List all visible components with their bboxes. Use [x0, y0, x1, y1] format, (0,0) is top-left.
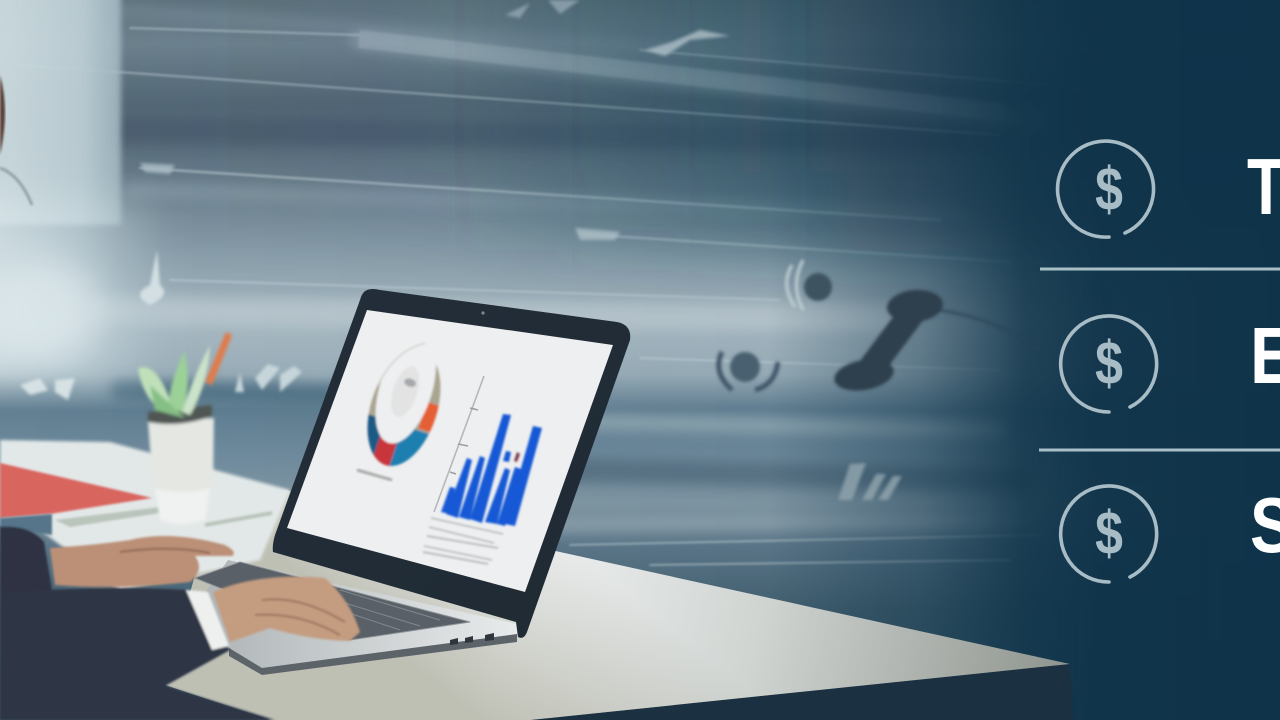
chart caption lines	[423, 518, 503, 564]
red stem	[205, 332, 232, 385]
businessperson arms	[0, 527, 360, 720]
laptop	[195, 289, 630, 675]
divider	[1039, 448, 1280, 452]
list row 2	[1061, 311, 1280, 412]
laptop lid	[273, 289, 630, 638]
axis line	[434, 376, 484, 512]
icon: dollar circle: $	[1095, 155, 1123, 223]
pens on desk	[55, 507, 272, 527]
desk side shadow	[500, 664, 1073, 720]
background: blurred telephone and ring marks	[20, 0, 1040, 500]
bar chart	[441, 414, 542, 526]
donut chart	[366, 342, 442, 468]
telephone handset	[868, 308, 916, 372]
cuff	[186, 590, 229, 650]
list row 3	[1061, 482, 1280, 582]
icon: dollar circle	[1061, 486, 1157, 582]
desk	[0, 440, 1073, 720]
soil	[148, 405, 212, 424]
background: bright window haze on the left	[0, 0, 170, 380]
desk top surface left	[0, 440, 290, 590]
near sleeve	[0, 588, 275, 720]
ports	[450, 633, 494, 645]
icon: dollar circle	[1061, 316, 1157, 412]
plant in white cup	[138, 332, 232, 524]
webcam	[481, 311, 485, 315]
cup	[148, 418, 214, 492]
icon: dollar circle: $	[1095, 329, 1123, 397]
screen	[287, 310, 613, 592]
leaves	[138, 367, 174, 415]
laptop base	[195, 560, 517, 675]
far sleeve	[0, 527, 52, 596]
far hand	[50, 536, 234, 587]
icon: dollar circle	[1058, 141, 1154, 237]
strip below notebook	[0, 514, 52, 535]
icon: dollar circle: $	[1095, 499, 1123, 567]
red notebook	[0, 463, 152, 518]
keyboard	[195, 562, 470, 640]
list row 1	[1058, 141, 1280, 237]
desk top surface right	[165, 490, 1070, 720]
divider	[1040, 268, 1280, 270]
near hand	[213, 577, 360, 642]
